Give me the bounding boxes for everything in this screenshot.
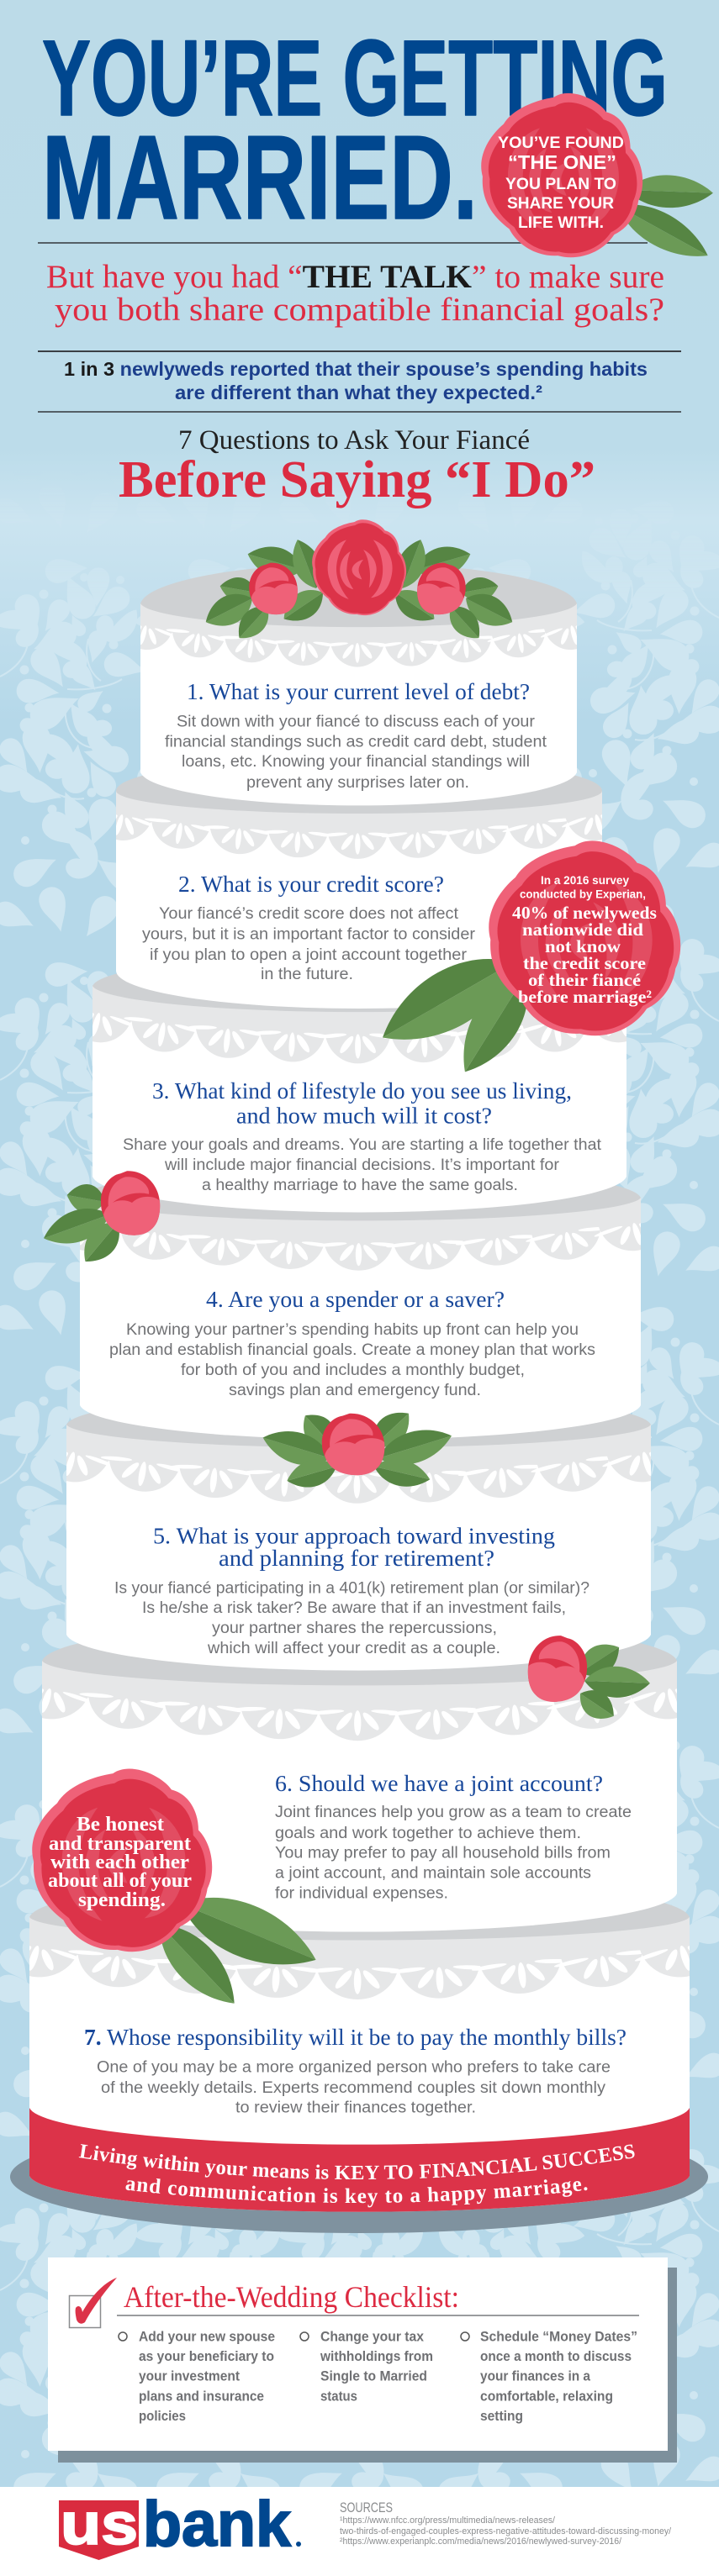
checklist column 3: Schedule “Money Dates” bbox=[480, 2328, 637, 2345]
section heading: 7 Questions to Ask Your Fiancé bbox=[178, 425, 530, 456]
question 2: in the future. bbox=[261, 966, 353, 983]
checklist column 1: Add your new spouse bbox=[139, 2328, 275, 2345]
checklist column 2 bbox=[300, 2328, 433, 2404]
statistic strip: 1 in 3 newlyweds reported that their spouse’s spending habits bbox=[64, 358, 648, 380]
checklist column 1 bbox=[119, 2328, 275, 2424]
callout: credit score rose: In a 2016 survey bbox=[541, 873, 629, 887]
cake tier 5 bbox=[23, 1393, 695, 1671]
question 3: and how much will it cost? bbox=[236, 1103, 492, 1128]
cake tier 1 bbox=[108, 563, 610, 805]
question 5 bbox=[114, 1523, 589, 1657]
question 2: 2. What is your credit score? bbox=[178, 872, 444, 897]
statistic strip bbox=[38, 350, 681, 413]
question 4: Knowing your partner’s spending habits up front can help you bbox=[126, 1321, 579, 1339]
question 2: yours, but it is an important factor to consider bbox=[142, 926, 476, 943]
checklist column 3: comfortable, relaxing bbox=[480, 2389, 613, 2404]
statistic strip: are different than what they expected.² bbox=[175, 382, 542, 403]
red ribbon message: Living within your means is KEY TO FINANCIAL SUCCESS bbox=[79, 2144, 635, 2179]
callout: credit score rose: 40% of newlyweds bbox=[512, 903, 657, 923]
flower: tier 5 centre bud bbox=[258, 1403, 456, 1493]
subheading: you both share compatible financial goals? bbox=[55, 292, 664, 328]
cake tier 2 bbox=[80, 757, 638, 1009]
logo: us bank bbox=[59, 2489, 301, 2560]
question 3: will include major financial decisions. It’s important for bbox=[164, 1156, 560, 1174]
checklist column 1: policies bbox=[139, 2408, 186, 2424]
question 6: You may prefer to pay all household bills from bbox=[275, 1844, 611, 1862]
divider under title bbox=[38, 242, 648, 244]
question 7: 7. Whose responsibility will it be to pay the monthly bills? bbox=[84, 2025, 626, 2050]
question 1 bbox=[165, 679, 547, 792]
callout: credit score rose bbox=[368, 840, 680, 1084]
callout: credit score rose: before marriage² bbox=[518, 987, 652, 1007]
logo: us bank: bank bbox=[143, 2489, 292, 2560]
panel: checklist bbox=[48, 2257, 677, 2463]
question 4: for both of you and includes a monthly budget, bbox=[181, 1362, 525, 1379]
callout: credit score rose: nationwide did bbox=[522, 919, 643, 940]
callout: honest rose bbox=[32, 1769, 326, 2017]
question 1: 1. What is your current level of debt? bbox=[187, 679, 530, 704]
question 6: goals and work together to achieve them. bbox=[275, 1825, 581, 1842]
checklist heading: After-the-Wedding Checklist: bbox=[124, 2280, 459, 2314]
checklist column 2: withholdings from bbox=[320, 2348, 433, 2364]
sources bbox=[340, 2500, 672, 2547]
checklist column 3: setting bbox=[480, 2408, 523, 2424]
callout: credit score rose: conducted by Experian, bbox=[520, 888, 646, 901]
title: MARRIED. bbox=[42, 111, 478, 245]
question 2 bbox=[142, 872, 476, 983]
question 5: Is your fiancé participating in a 401(k) retirement plan (or similar)? bbox=[114, 1580, 589, 1597]
question 5: which will affect your credit as a couple. bbox=[207, 1640, 500, 1657]
question 1: prevent any surprises later on. bbox=[246, 774, 469, 792]
cake tier 3 bbox=[53, 954, 666, 1212]
checklist column 2: Change your tax bbox=[320, 2328, 424, 2345]
section heading bbox=[119, 425, 595, 508]
icon: checkbox bbox=[69, 2278, 117, 2328]
question 1: loans, etc. Knowing your financial standings will bbox=[182, 753, 530, 771]
question 4 bbox=[109, 1287, 595, 1399]
callout: the one rose: YOU’VE FOUND bbox=[498, 134, 624, 152]
question 7: One of you may be a more organized person who prefers to take care bbox=[97, 2059, 611, 2076]
callout: honest rose: spending. bbox=[78, 1889, 166, 1911]
checklist column 3: your finances in a bbox=[480, 2368, 590, 2384]
callout: the one rose: LIFE WITH. bbox=[518, 214, 604, 232]
checklist column 2: Single to Married bbox=[320, 2368, 427, 2384]
callout: the one rose: “THE ONE” bbox=[508, 151, 616, 173]
sources: two-thirds-of-engaged-couples-express-negative-attitudes-toward-discussing-money/ bbox=[340, 2526, 672, 2536]
callout: honest rose: Be honest bbox=[77, 1814, 164, 1836]
question 2: Your fiancé’s credit score does not affect bbox=[159, 905, 459, 923]
red ribbon message: and communication is key to a happy marriage. bbox=[126, 2178, 587, 2207]
question 5: your partner shares the repercussions, bbox=[212, 1620, 497, 1637]
checklist column 2: status bbox=[320, 2389, 357, 2404]
callout: the one rose bbox=[481, 93, 716, 271]
callout: honest rose: with each other bbox=[50, 1852, 189, 1873]
question 7 bbox=[84, 2025, 626, 2116]
checklist column 1: your investment bbox=[139, 2368, 240, 2384]
callout: honest rose: about all of your bbox=[48, 1870, 192, 1892]
checklist column 3 bbox=[461, 2328, 637, 2424]
question 3: Share your goals and dreams. You are starting a life together that bbox=[123, 1136, 602, 1154]
title bbox=[42, 18, 668, 245]
question 6 bbox=[275, 1771, 632, 1903]
callout: credit score rose: the credit score bbox=[523, 953, 646, 973]
question 2: if you plan to open a joint account together bbox=[150, 946, 468, 964]
sources: ¹https://www.nfcc.org/press/multimedia/news-releases/ bbox=[340, 2515, 556, 2526]
cake topper flowers bbox=[199, 519, 519, 646]
checklist column 1: as your beneficiary to bbox=[139, 2348, 274, 2364]
question 6: a joint account, and maintain sole accounts bbox=[275, 1864, 591, 1883]
cake tier 7 bbox=[0, 1878, 719, 2212]
question 6: 6. Should we have a joint account? bbox=[275, 1771, 603, 1796]
question 4: 4. Are you a spender or a saver? bbox=[206, 1287, 505, 1312]
section heading: Before Saying “I Do” bbox=[119, 451, 595, 508]
logo: us bank: us bbox=[61, 2491, 138, 2557]
sources: SOURCES bbox=[340, 2500, 393, 2515]
footer band bbox=[0, 2487, 719, 2576]
subheading bbox=[46, 259, 664, 328]
callout: the one rose: SHARE YOUR bbox=[507, 195, 614, 213]
question 5: Is he/she a risk taker? Be aware that if an investment fails, bbox=[142, 1599, 566, 1617]
question 3 bbox=[123, 1078, 602, 1194]
checklist column 3: once a month to discuss bbox=[480, 2348, 632, 2364]
cake tier 6 bbox=[0, 1621, 719, 1932]
callout: honest rose: and transparent bbox=[49, 1833, 191, 1855]
red ribbon message bbox=[79, 2144, 635, 2207]
question 5: and planning for retirement? bbox=[219, 1546, 494, 1571]
question 1: financial standings such as credit card debt, student bbox=[165, 733, 547, 751]
flower: tier 4 left bud bbox=[39, 1171, 160, 1271]
checklist column 1: plans and insurance bbox=[139, 2389, 264, 2404]
callout: credit score rose: of their fiancé bbox=[528, 970, 641, 990]
question 6: for individual expenses. bbox=[275, 1884, 448, 1903]
callout: the one rose: YOU PLAN TO bbox=[505, 176, 616, 193]
flower: tier 6 right bud bbox=[528, 1636, 651, 1727]
question 3: a healthy marriage to have the same goals. bbox=[202, 1177, 518, 1194]
cake plate bbox=[10, 2120, 708, 2233]
question 4: plan and establish financial goals. Create a money plan that works bbox=[109, 1341, 595, 1359]
question 4: savings plan and emergency fund. bbox=[229, 1382, 481, 1399]
question 7: of the weekly details. Experts recommend couples sit down monthly bbox=[101, 2079, 606, 2097]
question 1: Sit down with your fiancé to discuss each of your bbox=[177, 713, 536, 731]
cake tier 4 bbox=[38, 1166, 683, 1440]
question 5: 5. What is your approach toward investing bbox=[153, 1523, 555, 1548]
sources: ²https://www.experianplc.com/media/news/2016/newlywed-survey-2016/ bbox=[340, 2536, 622, 2547]
question 6: Joint finances help you grow as a team to create bbox=[275, 1804, 632, 1821]
subheading: But have you had “THE TALK” to make sure bbox=[46, 259, 664, 295]
callout: credit score rose: not know bbox=[545, 936, 621, 956]
question 7: to review their finances together. bbox=[235, 2099, 476, 2116]
question 3: 3. What kind of lifestyle do you see us living, bbox=[152, 1078, 572, 1104]
